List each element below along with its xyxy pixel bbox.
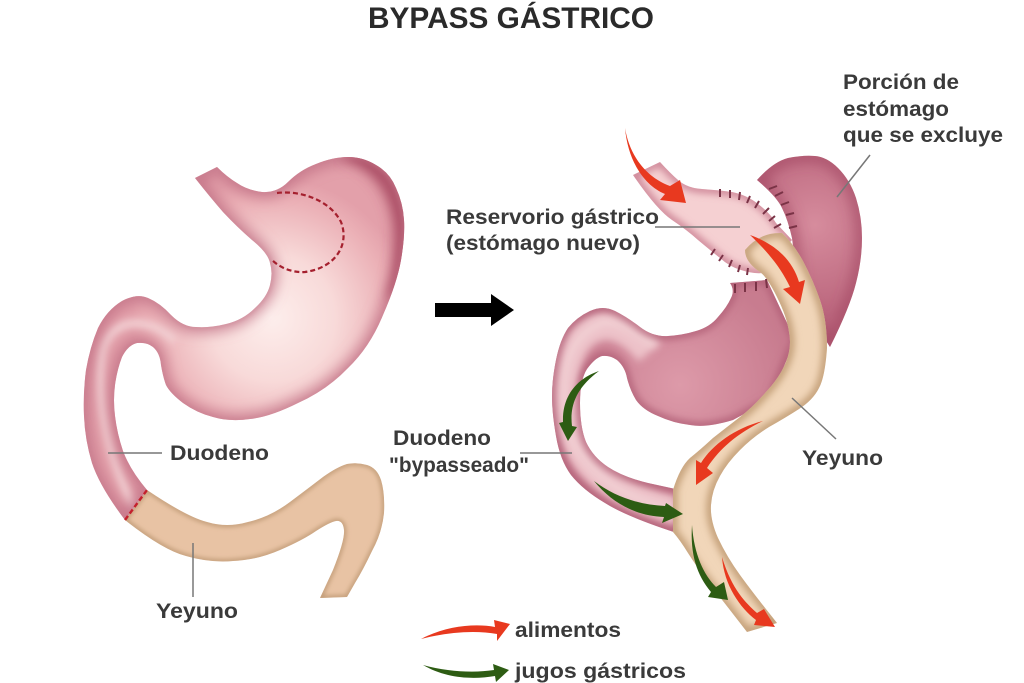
jejunum right: [673, 233, 827, 632]
legend: [421, 618, 686, 683]
label: Yeyuno right: Yeyuno: [802, 446, 883, 470]
legend: jugos gástricos: [423, 659, 686, 683]
title: BYPASS GÁSTRICO: [368, 1, 654, 35]
label: Duodeno bypasseado: "bypasseado": [389, 453, 529, 477]
arrow: before to after: [435, 294, 514, 326]
label: Yeyuno right: [792, 398, 883, 470]
label: Reservorio gástrico: (estómago nuevo): [446, 231, 640, 255]
food arrow 1: [625, 128, 686, 203]
legend: jugos gástricos: jugos gástricos: [514, 659, 686, 683]
legend: alimentos: [421, 618, 621, 642]
excluded stomach portion: [757, 156, 862, 347]
dashed cut line on stomach: [272, 192, 344, 272]
right diagram: after bypass: [389, 70, 1003, 632]
legend: alimentos: alimentos: [515, 618, 621, 642]
pouch: new stomach: [633, 162, 792, 273]
suture marks on lower stomach: [735, 279, 767, 293]
left diagram: original anatomy: [84, 150, 404, 623]
food arrow 3: [696, 421, 763, 485]
label: Duodeno bypasseado: [389, 426, 572, 477]
label: Duodeno bypasseado: Duodeno: [393, 426, 491, 450]
label: Porción de estómago que se excluye: Porción de: [843, 70, 959, 94]
gastric juice arrow 3: [692, 525, 728, 600]
label: Porción de estómago que se excluye: que se excluye: [843, 123, 1003, 147]
label: Reservorio gástrico: Reservorio gástrico: [446, 205, 659, 229]
food arrow 4: [722, 557, 775, 627]
food arrow 2: [750, 235, 805, 304]
lower stomach and bypassed duodenum: [552, 280, 795, 534]
label: Yeyuno left: [156, 543, 238, 623]
label: Porción de estómago que se excluye: estómago: [843, 97, 949, 121]
suture marks on excluded portion: [769, 186, 797, 228]
label: Porción de estómago que se excluye: [837, 70, 1003, 197]
label: Reservorio gástrico: [446, 205, 740, 255]
stomach and duodenum left: [84, 150, 404, 520]
gastric juice arrow 2: [594, 481, 683, 523]
gastric juice arrow 1: [559, 371, 599, 441]
label: Yeyuno left: Yeyuno: [156, 599, 238, 623]
suture marks on pouch: [711, 189, 781, 275]
jejunum left: [125, 463, 384, 598]
dashed cut line on duodenum: [125, 490, 147, 520]
label: Duodeno left: Duodeno: [170, 441, 269, 465]
